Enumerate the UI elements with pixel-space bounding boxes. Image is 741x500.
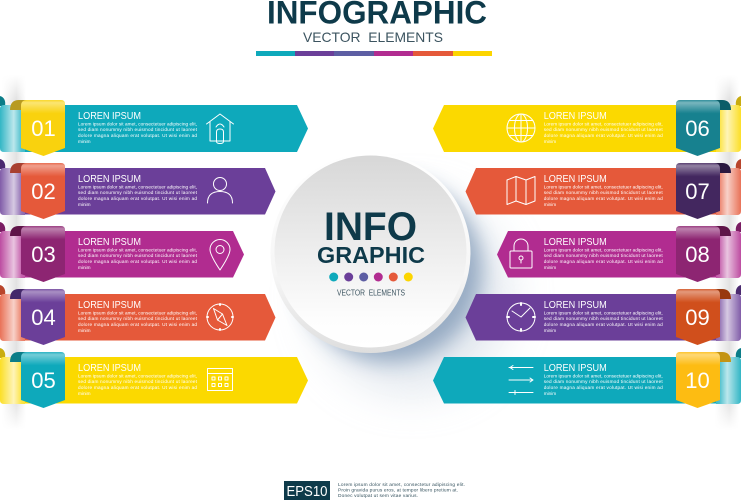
row 07: minim — [544, 202, 556, 207]
row 04: dolore magna aliquam erat volutpat. Ut wisi enim ad — [78, 322, 197, 327]
icon: map pin — [210, 240, 230, 270]
row 09: minim — [544, 328, 556, 333]
row 08: 08 — [685, 242, 710, 267]
tag 09 ribbon and fold — [676, 285, 741, 345]
row 02 — [0, 159, 276, 219]
footer text: Lorem ipsum dolor sit amet, consectetur adipiscing elit. — [338, 482, 465, 488]
row 07: LOREN IPSUM — [544, 174, 607, 185]
row 06 — [433, 96, 741, 156]
title — [267, 0, 487, 45]
row 03 — [0, 222, 244, 282]
row 07: dolore magna aliquam erat volutpat. Ut wisi enim ad — [544, 196, 663, 201]
row 03: Lorem ipsum dolor sit amet, consectetuer adipiscing elit, — [78, 248, 197, 252]
row 02: minim — [78, 202, 91, 207]
row 09: Lorem ipsum dolor sit amet, consectetuer adipiscing elit, — [544, 310, 663, 316]
row 01 — [0, 96, 308, 156]
row 03: LOREN IPSUM — [78, 237, 141, 248]
tag 08 ribbon and fold — [676, 222, 741, 282]
row 01: LOREN IPSUM — [78, 111, 141, 122]
icon: house — [206, 114, 234, 144]
row 04: LOREN IPSUM — [78, 300, 141, 311]
row 01: minim — [78, 139, 91, 144]
row 02: Lorem ipsum dolor sit amet, consectetuer adipiscing elit, — [78, 184, 197, 190]
row 09: LOREN IPSUM — [544, 300, 607, 311]
row 05: dolore magna aliquam erat volutpat. Ut wisi enim ad — [78, 385, 197, 390]
row 05: LOREN IPSUM — [78, 363, 141, 374]
row 05 — [0, 348, 308, 408]
footer text — [338, 482, 465, 499]
colour bar — [256, 51, 492, 56]
row 10: LOREN IPSUM — [544, 363, 607, 374]
icon: globe — [507, 114, 535, 142]
row 10: sed diam nonummy nibh euismod tincidunt ut laoreet — [544, 379, 663, 384]
row 05: 05 — [31, 368, 56, 393]
row 08: LOREN IPSUM — [544, 237, 607, 248]
tag 07 ribbon and fold — [676, 159, 741, 219]
footer text: Proin gravida purus eros, at tempor libero pretium at. — [338, 488, 458, 494]
row 10 — [433, 348, 741, 408]
row 02: sed diam nonummy nibh euismod tincidunt ut laoreet — [78, 190, 198, 195]
icon: person — [208, 178, 232, 203]
row 03: 03 — [31, 242, 56, 267]
row 01: sed diam nonummy nibh euismod tincidunt ut laoreet — [78, 127, 198, 132]
row 07: Lorem ipsum dolor sit amet, consectetuer adipiscing elit, — [544, 184, 663, 190]
row 01: 01 — [31, 116, 56, 141]
row 10: Lorem ipsum dolor sit amet, consectetuer adipiscing elit, — [544, 374, 663, 378]
row 03: minim — [78, 265, 91, 270]
centre subtitle: VECTOR ELEMENTS — [337, 288, 405, 298]
row 06: LOREN IPSUM — [544, 111, 607, 122]
row 07: sed diam nonummy nibh euismod tincidunt ut laoreet — [544, 190, 663, 195]
centre heading — [317, 205, 425, 268]
row 02: LOREN IPSUM — [78, 174, 141, 185]
centre circle shadow — [298, 178, 508, 392]
row 06: Lorem ipsum dolor sit amet, consectetuer adipiscing elit, — [544, 122, 663, 126]
row 09 — [466, 285, 741, 345]
row 07: 07 — [685, 179, 710, 204]
footer EPS badge: EPS10 — [286, 484, 328, 500]
icon: padlock — [510, 239, 532, 268]
row 08: minim — [544, 265, 556, 270]
row 03: sed diam nonummy nibh euismod tincidunt ut laoreet — [78, 253, 198, 258]
side shadow strips — [0, 75, 741, 430]
row 06: dolore magna aliquam erat volutpat. Ut wisi enim ad — [544, 133, 663, 138]
row 08 — [497, 222, 741, 282]
row 04 — [0, 285, 276, 345]
row 10: dolore magna aliquam erat volutpat. Ut wisi enim ad — [544, 385, 663, 390]
row 04: 04 — [31, 305, 56, 330]
row 08: dolore magna aliquam erat volutpat. Ut wisi enim ad — [544, 259, 663, 264]
icon: clock — [507, 303, 535, 331]
tag 10 ribbon and fold — [676, 348, 741, 408]
title: VECTOR ELEMENTS — [303, 29, 443, 45]
icon: sliders arrows — [509, 366, 533, 394]
row 02: dolore magna aliquam erat volutpat. Ut wisi enim ad — [78, 196, 197, 201]
row 10: minim — [544, 391, 556, 396]
row 03: dolore magna aliquam erat volutpat. Ut wisi enim ad — [78, 259, 197, 264]
row 01: dolore magna aliquam erat volutpat. Ut wisi enim ad — [78, 133, 197, 138]
row 09: dolore magna aliquam erat volutpat. Ut wisi enim ad — [544, 322, 663, 327]
row 09: 09 — [685, 305, 710, 330]
row 05: minim — [78, 391, 91, 396]
row 08: Lorem ipsum dolor sit amet, consectetuer adipiscing elit, — [544, 248, 663, 252]
row 04: Lorem ipsum dolor sit amet, consectetuer adipiscing elit, — [78, 310, 197, 316]
row 09: sed diam nonummy nibh euismod tincidunt ut laoreet — [544, 316, 663, 321]
footer text: Donec volutpat ut sem vitae varius. — [338, 493, 418, 499]
row 08: sed diam nonummy nibh euismod tincidunt ut laoreet — [544, 253, 663, 258]
row 04: sed diam nonummy nibh euismod tincidunt ut laoreet — [78, 316, 198, 321]
centre heading: INFO — [324, 205, 417, 249]
row 06: 06 — [685, 116, 710, 141]
row 10: 10 — [685, 368, 710, 393]
row 06: minim — [544, 139, 556, 144]
tag 06 ribbon and fold — [676, 96, 741, 156]
centre colour dots — [329, 272, 413, 282]
centre circle — [270, 153, 470, 353]
row 05: Lorem ipsum dolor sit amet, consectetuer adipiscing elit, — [78, 374, 197, 378]
row 04: minim — [78, 328, 91, 333]
icon: calendar — [208, 368, 232, 390]
row 05: sed diam nonummy nibh euismod tincidunt ut laoreet — [78, 379, 198, 384]
row 07 — [466, 159, 741, 219]
row 06: sed diam nonummy nibh euismod tincidunt ut laoreet — [544, 127, 663, 132]
icon: compass — [207, 304, 233, 330]
centre heading: GRAPHIC — [317, 242, 425, 268]
row 01: Lorem ipsum dolor sit amet, consectetuer adipiscing elit, — [78, 122, 197, 126]
row 02: 02 — [31, 179, 56, 204]
icon: folded map — [507, 176, 535, 204]
